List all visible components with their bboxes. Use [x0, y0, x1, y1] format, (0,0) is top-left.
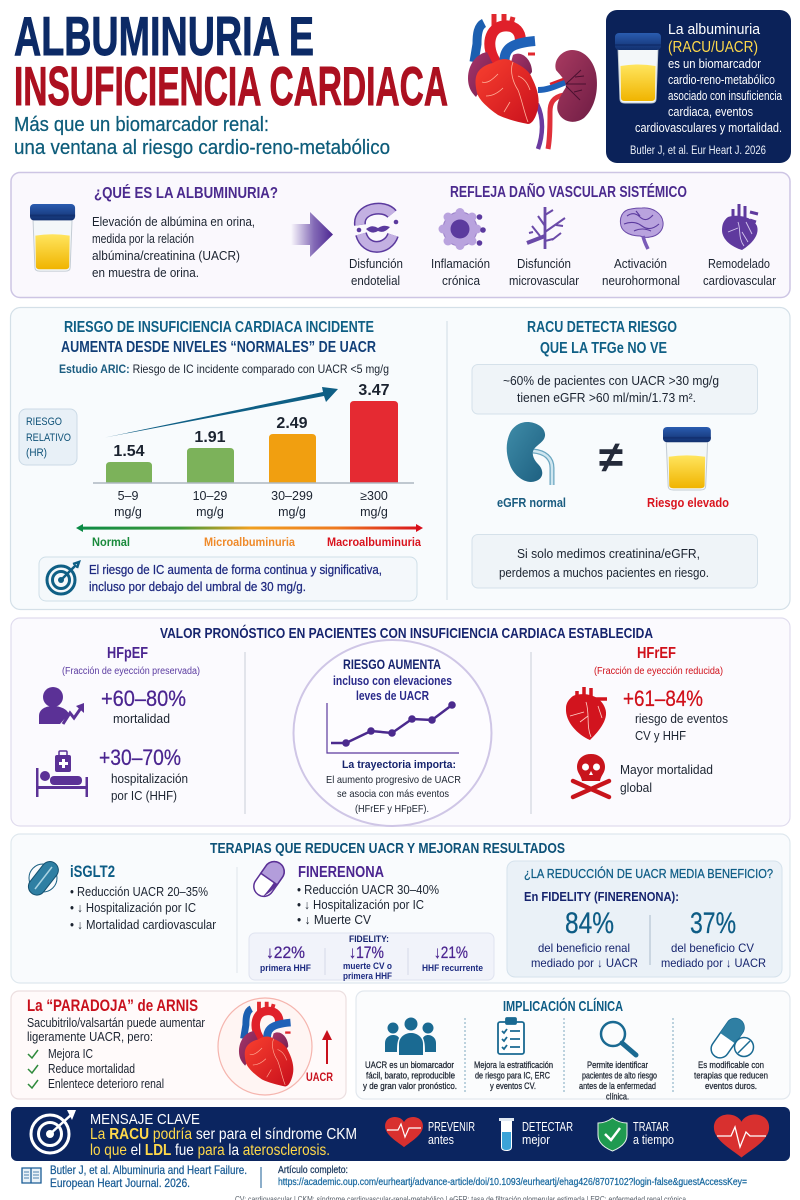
FIDELITY results box	[249, 933, 494, 982]
stat: CV events: riesgo de eventos	[635, 711, 728, 726]
axis label: (HR)	[26, 447, 47, 459]
axis label: RIESGO	[26, 416, 62, 428]
arrow: UACR up: UACR	[306, 1072, 334, 1084]
therapy: iSGLT2	[25, 858, 216, 932]
illustration: heart and kidney	[468, 14, 597, 149]
item: detect	[499, 1118, 573, 1151]
paradox text: Sacubitrilo/valsartán puede aumentar	[27, 1015, 206, 1030]
mechanism labels: Disfunción	[517, 257, 571, 271]
mediation box	[507, 861, 782, 977]
panel: clinical implication	[356, 991, 790, 1102]
icon: large heart	[714, 1114, 769, 1157]
therapy: finerenone	[250, 858, 439, 927]
FIDELITY results box: ↓22%	[266, 943, 305, 962]
paradox text: Enlentece deterioro renal	[48, 1076, 164, 1091]
stat: hospitalization: por IC (HHF)	[111, 788, 177, 803]
trajectory text: (HFrEF y HFpEF).	[355, 803, 429, 815]
category labels: 30–299	[271, 489, 313, 503]
icon: target	[47, 562, 79, 594]
icon: microvascular dysfunction	[527, 207, 565, 249]
stat: CV benefit: del beneficio CV	[671, 941, 754, 955]
stat box: tienen eGFR >60 ml/min/1.73 m².	[517, 391, 696, 405]
heading: RACU detects risk	[527, 319, 677, 357]
trajectory text: La trayectoria importa:	[342, 759, 456, 771]
icon: skull and crossbones	[573, 754, 609, 797]
item: prevent: PREVENIR	[428, 1120, 475, 1134]
panel: ARNI paradox	[11, 991, 346, 1099]
icon: checklist clipboard	[498, 1018, 524, 1054]
arrow: UACR up	[306, 1030, 334, 1084]
check marks	[28, 1050, 38, 1088]
subtitle	[14, 114, 390, 159]
stat: renal benefit: 84%	[565, 907, 614, 940]
stat: renal benefit	[531, 907, 638, 970]
icon: book	[22, 1168, 41, 1183]
footer: citation: European Heart Journal. 2026.	[50, 1176, 190, 1190]
trajectory text	[326, 759, 461, 815]
callout	[39, 557, 417, 601]
mechanism labels: Disfunción	[349, 257, 403, 271]
therapy: finerenone: • Reducción UACR 30–40%	[297, 883, 439, 897]
warning box	[472, 534, 758, 588]
icon: cardiovascular remodeling	[722, 204, 758, 250]
item: detect: mejor	[522, 1133, 550, 1147]
category labels: mg/g	[360, 505, 388, 519]
stat: mortality: +60–80%	[101, 686, 186, 711]
bar values: 1.54	[113, 443, 145, 460]
therapy: iSGLT2: • ↓ Mortalidad cardiovascular	[70, 918, 216, 932]
severity scale arrow	[76, 524, 423, 532]
implication texts: de riesgo para IC, ERC	[475, 1070, 550, 1082]
icon: chronic inflammation	[438, 208, 486, 250]
stat: CV events: CV y HHF	[635, 728, 686, 743]
stat: mortality: mortalidad	[113, 711, 170, 726]
heading: clinical implication: IMPLICACIÓN CLÍNICA	[503, 997, 623, 1015]
implication texts: Permite identificar	[587, 1060, 648, 1071]
implication texts: eventos duros.	[705, 1081, 757, 1092]
bar values	[113, 382, 390, 460]
FIDELITY results box: ↓17%	[349, 943, 384, 962]
definition text: medida por la relación	[92, 231, 194, 246]
axis label	[19, 409, 77, 465]
icon: patient with rising arrow	[39, 687, 84, 724]
FIDELITY results box: HHF recurrente	[422, 963, 483, 974]
panel: definition card	[606, 10, 791, 163]
therapy: finerenone: • ↓ Muerte CV	[297, 913, 372, 927]
panel: what is albuminuria	[11, 172, 790, 298]
item: treat: TRATAR	[633, 1120, 669, 1134]
footer: citation	[22, 1163, 247, 1190]
paradox text: Mejora IC	[48, 1046, 93, 1061]
stat box	[472, 364, 758, 414]
bar values: 3.47	[358, 382, 390, 399]
panel: prognostic value	[11, 618, 790, 826]
icon: red heart	[566, 687, 607, 740]
column: HFpEF	[36, 645, 200, 803]
stat: CV benefit: 37%	[690, 907, 736, 940]
item: prevent	[385, 1117, 475, 1147]
trend arrow	[105, 387, 338, 438]
implication texts: UACR es un biomarcador	[365, 1060, 454, 1071]
icon: neurohormonal activation	[620, 208, 663, 249]
therapy: iSGLT2: • ↓ Hospitalización por IC	[70, 901, 196, 915]
mechanism labels: neurohormonal	[602, 274, 680, 288]
column: HFpEF: HFpEF	[107, 645, 148, 662]
icon: magnifier	[601, 1022, 636, 1055]
circle heading	[333, 657, 452, 703]
icon: finerenone capsule	[250, 858, 288, 900]
severity labels: Microalbuminuria	[204, 537, 296, 549]
icon: pills	[708, 1015, 754, 1061]
column: trajectory circle	[294, 640, 492, 826]
title	[14, 5, 448, 117]
definition text: en muestra de orina.	[92, 265, 199, 280]
trajectory text: se asocia con más eventos	[337, 788, 449, 800]
stat: mortality: global	[620, 780, 652, 795]
item: prevent: antes	[428, 1133, 454, 1147]
key message text: La RACU podría ser para el síndrome CKM	[90, 1126, 357, 1143]
column: HFpEF: (Fracción de eyección preservada)	[62, 666, 200, 677]
therapy: finerenone: • ↓ Hospitalización por IC	[297, 898, 424, 912]
illustration: heart in circle	[218, 998, 312, 1095]
FIDELITY results box: muerte CV o	[343, 961, 392, 972]
key message text: MENSAJE CLAVE	[90, 1111, 200, 1128]
key message text: lo que el LDL fue para la aterosclerosis.	[90, 1142, 330, 1159]
paradox text: Reduce mortalidad	[48, 1061, 135, 1076]
paradox text	[27, 1015, 206, 1091]
category labels	[114, 489, 388, 519]
circle heading: leves de UACR	[356, 689, 429, 703]
stat: mortality	[620, 762, 713, 795]
implication texts: clínica.	[606, 1092, 629, 1102]
card text: cardio-reno-metabólico	[668, 72, 775, 87]
category labels: 10–29	[193, 489, 227, 503]
implication texts: y de gran valor pronóstico.	[363, 1081, 457, 1092]
bar values: 2.49	[276, 415, 308, 432]
warning box: perdemos a muchos pacientes en riesgo.	[499, 566, 709, 580]
heading: incident risk: AUMENTA DESDE NIVELES “NORMALES” DE UACR	[61, 339, 376, 356]
stat: CV events	[623, 686, 728, 743]
icon: people	[385, 1018, 436, 1055]
implication texts: terapias que reducen	[694, 1070, 768, 1082]
callout text	[89, 563, 382, 594]
stat: CV events: +61–84%	[623, 686, 703, 711]
mechanism labels: cardiovascular	[703, 274, 776, 288]
therapy: iSGLT2: • Reducción UACR 20–35%	[70, 885, 208, 899]
stat: CV benefit	[661, 907, 766, 970]
category labels: mg/g	[114, 505, 142, 519]
panel: incident heart failure risk	[10, 308, 790, 610]
icon: hospital bed	[36, 751, 88, 797]
FIDELITY results box: primera HHF	[260, 963, 311, 974]
icon: iSGLT2 capsule	[25, 858, 62, 899]
stat: renal benefit: mediado por ↓ UACR	[531, 956, 638, 970]
severity labels: Normal	[92, 537, 130, 549]
category labels: ≥300	[360, 489, 388, 503]
heading: incident risk	[61, 319, 376, 356]
implication texts: y eventos CV.	[490, 1081, 536, 1092]
title: INSUFICIENCIA CARDIACA	[14, 55, 448, 117]
bar values: 1.91	[194, 429, 226, 446]
severity labels: Macroalbuminuria	[327, 537, 422, 549]
stat box: ~60% de pacientes con UACR >30 mg/g	[503, 374, 719, 388]
mechanism labels: Remodelado	[708, 257, 770, 271]
stat: hospitalization: +30–70%	[99, 745, 181, 770]
card text: es un biomarcador	[668, 56, 762, 71]
panel: therapies	[11, 834, 790, 983]
callout text: El riesgo de IC aumenta de forma continua y significativa,	[89, 563, 382, 577]
heading: RACU detects risk: RACU DETECTA RIESGO	[527, 319, 677, 336]
card text: (RACU/UACR)	[668, 39, 758, 56]
subtitle: una ventana al riesgo cardio-reno-metabólico	[14, 137, 390, 159]
therapy: finerenone: FINERENONA	[298, 864, 384, 881]
not-equal sign: ≠	[599, 433, 623, 482]
title: ALBUMINURIA E	[14, 5, 314, 67]
FIDELITY results box: primera HHF	[343, 971, 392, 982]
item: treat: a tiempo	[633, 1133, 674, 1147]
definition text: Elevación de albúmina en orina,	[92, 214, 255, 229]
column: HFrEF: (Fracción de eyección reducida)	[594, 666, 723, 677]
card text	[630, 21, 783, 157]
arrow	[291, 212, 333, 257]
therapy: iSGLT2: iSGLT2	[70, 862, 115, 881]
implication texts: Mejora la estratificación	[474, 1060, 553, 1071]
column: HFrEF	[566, 645, 728, 797]
mechanism labels: microvascular	[509, 274, 579, 288]
paradox text: ligeramente UACR, pero:	[27, 1029, 153, 1044]
footer: citation: Butler J, et al. Albuminuria and Heart Failure.	[50, 1163, 247, 1177]
stat: CV benefit: mediado por ↓ UACR	[661, 956, 766, 970]
stat: hospitalization: hospitalización	[111, 771, 188, 786]
mechanism labels	[349, 257, 776, 288]
kidney label: eGFR normal	[497, 496, 566, 510]
stat: renal benefit: del beneficio renal	[538, 941, 630, 955]
mechanism labels: endotelial	[351, 274, 400, 288]
category labels: mg/g	[196, 505, 224, 519]
icon: urine cup	[663, 427, 711, 490]
footer: article link: Artículo completo:	[278, 1164, 348, 1176]
mechanism labels: Inflamación	[431, 257, 490, 271]
definition text	[92, 214, 255, 280]
FIDELITY results box: ↓21%	[434, 943, 468, 962]
category labels: mg/g	[278, 505, 306, 519]
column: HFrEF: HFrEF	[637, 645, 676, 662]
subtitle: Más que un biomarcador renal:	[14, 114, 269, 136]
card text: cardiaca, eventos	[668, 104, 753, 119]
FIDELITY results box: FIDELITY:	[349, 934, 389, 945]
mediation box: En FIDELITY (FINERENONA):	[524, 890, 679, 904]
item: detect: DETECTAR	[522, 1120, 573, 1134]
warning box: Si solo medimos creatinina/eGFR,	[517, 547, 700, 561]
bar chart	[93, 382, 414, 519]
definition text: albúmina/creatinina (UACR)	[92, 248, 240, 263]
category labels: 5–9	[118, 489, 138, 503]
icon: endothelial dysfunction	[357, 209, 398, 247]
banner: key message	[11, 1107, 790, 1161]
circle heading: incluso con elevaciones	[333, 674, 452, 688]
mechanism labels: Activación	[614, 257, 667, 271]
implication texts: Es modificable con	[698, 1060, 764, 1071]
severity labels	[92, 537, 422, 549]
heading: what is albuminuria: ¿QUÉ ES LA ALBUMINURIA?	[94, 183, 278, 202]
trajectory text: El aumento progresivo de UACR	[326, 774, 461, 786]
implication texts: fácil, barato, reproducible	[366, 1070, 455, 1082]
mechanism labels: crónica	[442, 274, 480, 288]
circle heading: RIESGO AUMENTA	[343, 657, 441, 672]
card text: Butler J, et al. Eur Heart J. 2026	[630, 145, 766, 157]
icon: urine cup	[30, 204, 75, 271]
stat: mortality	[101, 686, 186, 726]
callout text: incluso por debajo del umbral de 30 mg/g.	[89, 580, 306, 594]
heading: RACU detects risk: QUE LA TFGe NO VE	[540, 340, 667, 357]
stat: hospitalization	[99, 745, 188, 803]
icon: kidney	[507, 422, 552, 485]
cup label: Riesgo elevado	[647, 496, 729, 510]
heading: prognostic value: VALOR PRONÓSTICO EN PACIENTES CON INSUFICIENCIA CARDIACA ESTABLECIDA	[160, 624, 653, 642]
heading: paradox: La “PARADOJA” de ARNIS	[27, 996, 198, 1015]
icon: target with arrow	[31, 1110, 76, 1153]
key message text	[90, 1111, 357, 1159]
axis label: RELATIVO	[26, 432, 71, 444]
card text: La albuminuria	[668, 21, 761, 38]
heading: systemic vascular damage: REFLEJA DAÑO VASCULAR SISTÉMICO	[450, 181, 687, 201]
heading: therapies: TERAPIAS QUE REDUCEN UACR Y MEJORAN RESULTADOS	[210, 840, 565, 857]
implication texts: antes de la enfermedad	[579, 1081, 656, 1092]
heading: incident risk: RIESGO DE INSUFICIENCIA CARDIACA INCIDENTE	[64, 319, 374, 336]
icon: urine cup	[615, 33, 661, 103]
stat: mortality: Mayor mortalidad	[620, 762, 713, 777]
study subtitle: Estudio ARIC: Riesgo de IC incidente comparado con UACR <5 mg/g	[59, 362, 389, 376]
footer: article link	[278, 1164, 747, 1188]
line chart	[327, 701, 459, 753]
implication texts: pacientes de alto riesgo	[582, 1070, 657, 1082]
implication texts	[363, 1060, 768, 1102]
item: treat	[598, 1118, 674, 1151]
